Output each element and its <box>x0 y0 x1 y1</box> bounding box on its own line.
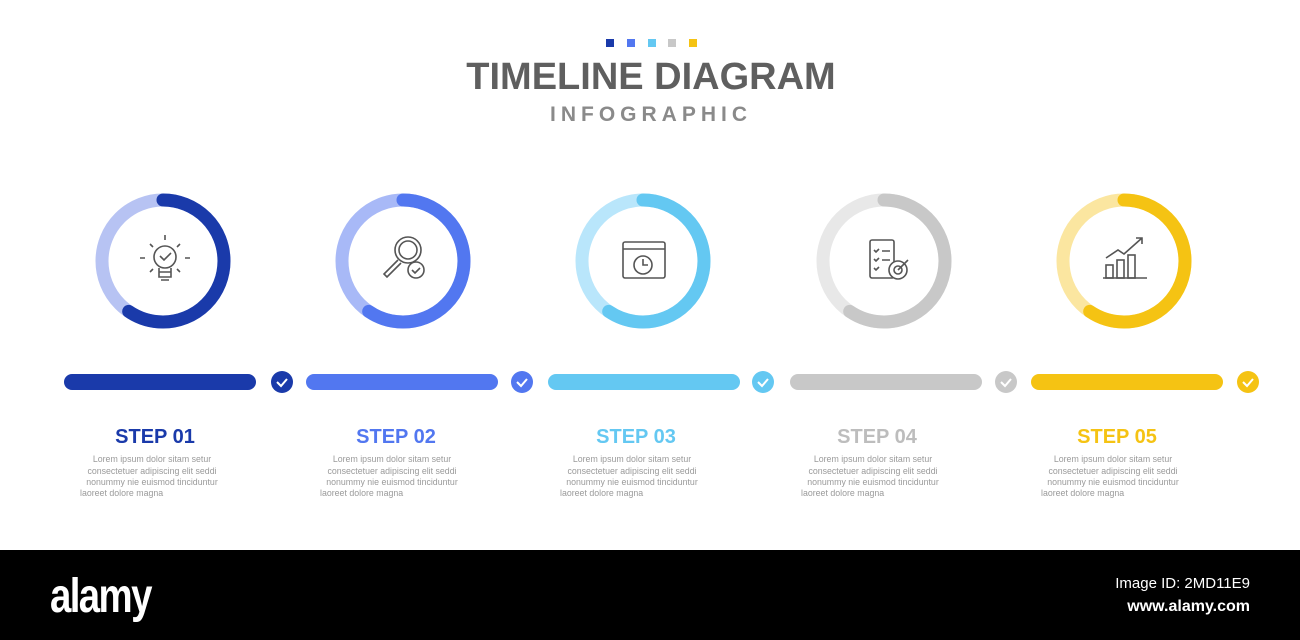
color swatches <box>606 39 697 47</box>
step 4 text: laoreet dolore magna <box>801 488 884 498</box>
step 4 text: nonummy nie euismod tinciduntur <box>807 477 939 487</box>
step 4 <box>790 200 1017 498</box>
step 2 text: consectetuer adipiscing elit seddi <box>327 466 457 476</box>
step 2 text: Lorem ipsum dolor sitam setur <box>333 454 451 464</box>
step 3 text: laoreet dolore magna <box>560 488 643 498</box>
step 3 text: consectetuer adipiscing elit seddi <box>567 466 697 476</box>
footer id: Image ID: 2MD11E9 <box>1115 575 1250 592</box>
step 1 <box>64 200 293 498</box>
step 5 <box>1031 200 1259 498</box>
ring 3 <box>582 200 704 322</box>
step 4 text: Lorem ipsum dolor sitam setur <box>814 454 932 464</box>
step 2 text: nonummy nie euismod tinciduntur <box>326 477 458 487</box>
ring 4 <box>823 200 945 322</box>
ring 2 <box>342 200 464 322</box>
icon: magnifier <box>384 237 424 278</box>
icon: growth chart <box>1103 238 1147 278</box>
step 3 <box>548 200 774 498</box>
timeline bar 5 <box>1031 374 1223 390</box>
step 5 title: STEP 05 <box>1077 426 1157 448</box>
step 1 text: consectetuer adipiscing elit seddi <box>87 466 217 476</box>
step 2 title: STEP 02 <box>356 426 436 448</box>
step 2 <box>306 200 533 498</box>
step 3 title: STEP 03 <box>596 426 676 448</box>
step 3 text: Lorem ipsum dolor sitam setur <box>573 454 691 464</box>
footer url: www.alamy.com <box>1126 598 1250 615</box>
step 1 text: laoreet dolore magna <box>80 488 163 498</box>
check 5 <box>1237 371 1259 393</box>
step 1 text: Lorem ipsum dolor sitam setur <box>93 454 211 464</box>
step 1 title: STEP 01 <box>115 426 195 448</box>
step 4 title: STEP 04 <box>837 426 918 448</box>
step 5 text: consectetuer adipiscing elit seddi <box>1048 466 1178 476</box>
timeline bar 2 <box>306 374 498 390</box>
footer band <box>0 550 1300 640</box>
ring 1 <box>102 200 224 322</box>
step 5 text: nonummy nie euismod tinciduntur <box>1047 477 1179 487</box>
step 2 text: laoreet dolore magna <box>320 488 403 498</box>
icon: browser clock <box>623 242 665 278</box>
subtitle: INFOGRAPHIC <box>550 103 752 126</box>
title: TIMELINE DIAGRAM <box>466 56 836 98</box>
check 1 <box>271 371 293 393</box>
step 1 text: nonummy nie euismod tinciduntur <box>86 477 218 487</box>
check 2 <box>511 371 533 393</box>
step 4 text: consectetuer adipiscing elit seddi <box>808 466 938 476</box>
check 3 <box>752 371 774 393</box>
icon: lightbulb <box>140 235 190 280</box>
check 4 <box>995 371 1017 393</box>
step 5 text: Lorem ipsum dolor sitam setur <box>1054 454 1172 464</box>
step 3 text: nonummy nie euismod tinciduntur <box>566 477 698 487</box>
step 5 text: laoreet dolore magna <box>1041 488 1124 498</box>
footer logo: alamy <box>50 570 152 623</box>
icon: checklist target <box>870 240 908 279</box>
timeline bar 1 <box>64 374 256 390</box>
timeline bar 4 <box>790 374 982 390</box>
ring 5 <box>1063 200 1185 322</box>
timeline bar 3 <box>548 374 740 390</box>
